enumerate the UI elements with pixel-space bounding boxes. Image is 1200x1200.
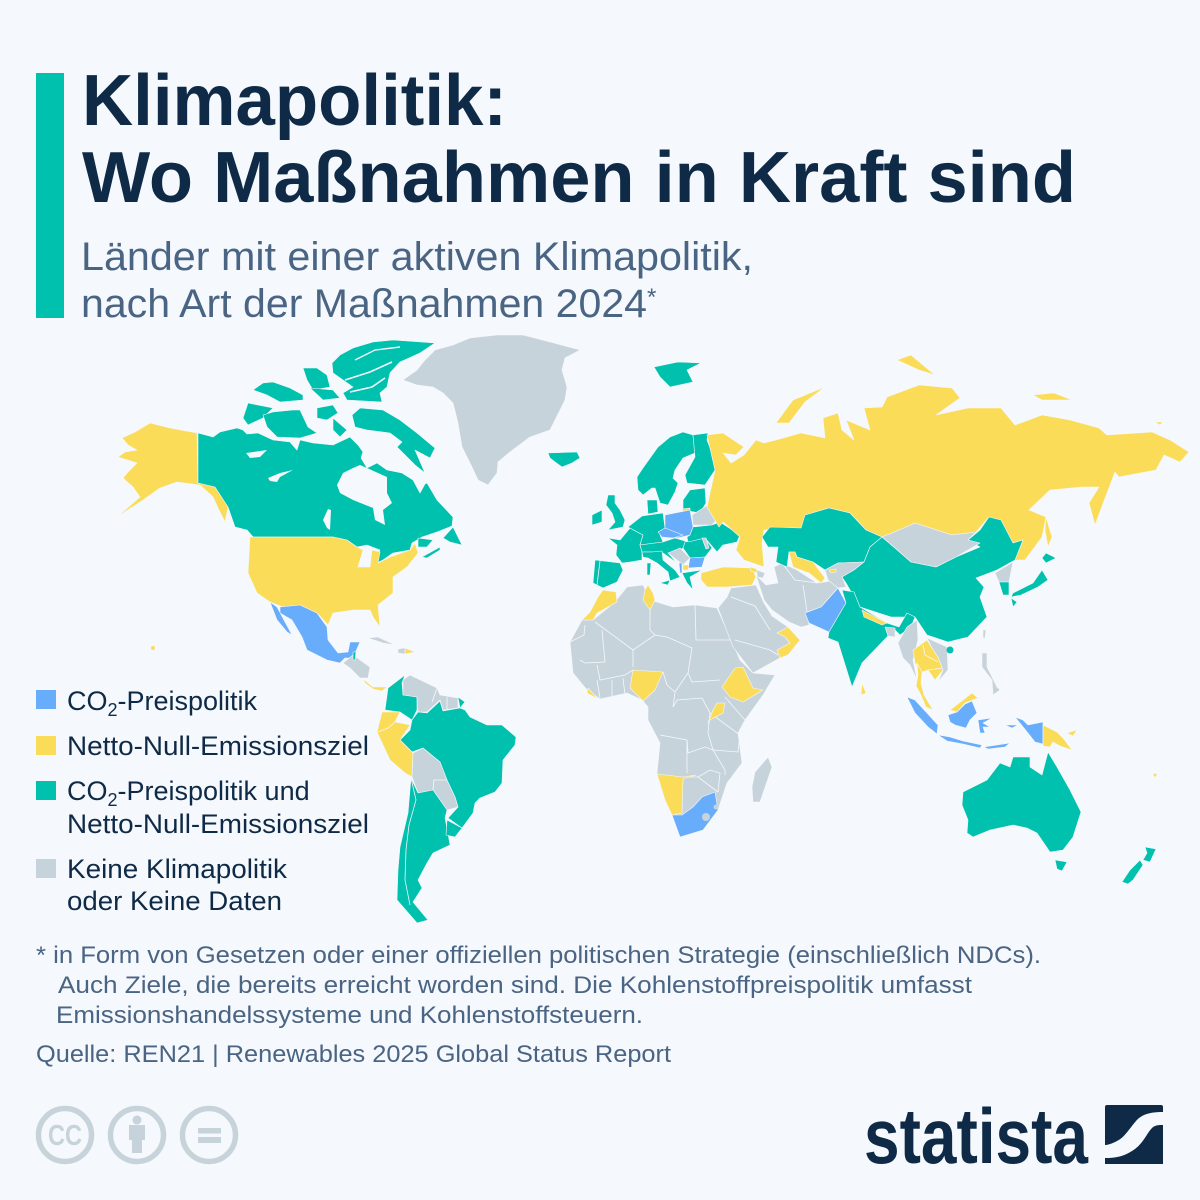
Canada <box>198 340 462 565</box>
legend item: none: Keine Klimapolitik <box>67 854 288 884</box>
subtitle: nach Art der Maßnahmen 2024 <box>81 282 647 326</box>
Hainan <box>946 646 954 654</box>
icon: statista mark <box>1105 1105 1163 1164</box>
legend item: net zero: Netto-Null-Emissionsziel <box>67 731 369 761</box>
Brazil <box>400 701 516 828</box>
Africa <box>570 585 775 837</box>
South America <box>377 675 516 923</box>
Germany and Benelux <box>628 513 665 545</box>
Russia <box>707 355 1189 567</box>
footnote: Emissionshandelssysteme und Kohlenstoffsteuern. <box>56 1002 643 1029</box>
Balkans <box>668 548 690 565</box>
Sri Lanka <box>861 683 866 695</box>
Belarus <box>692 505 718 525</box>
icon: creative commons: CC <box>48 1120 82 1152</box>
icon: attribution <box>110 1108 164 1162</box>
Tasmania <box>1055 860 1067 871</box>
Europe <box>592 362 740 590</box>
Iceland <box>548 452 580 467</box>
Moldova <box>702 538 709 549</box>
legend item: both: 2 <box>108 790 118 810</box>
Pakistan <box>805 588 846 632</box>
Thailand, Laos, Cambodia <box>913 640 943 680</box>
North America <box>117 335 580 691</box>
Australia <box>962 752 1081 852</box>
Romania <box>683 538 712 558</box>
legend <box>36 686 369 916</box>
subtitle: * <box>647 284 656 311</box>
Finland <box>685 433 715 485</box>
Malay peninsula <box>916 663 933 710</box>
legend item: both: CO <box>67 776 108 806</box>
Nigeria <box>630 670 663 701</box>
Papua New Guinea <box>1043 725 1072 750</box>
icon: creative commons <box>38 1108 92 1162</box>
Greenland <box>403 335 580 485</box>
statista logo: statista <box>864 1092 1088 1180</box>
Vietnam <box>927 638 948 682</box>
France <box>608 528 643 563</box>
legend item: both: -Preispolitik und <box>118 776 310 806</box>
Madagascar <box>752 757 772 802</box>
legend item: both <box>36 776 369 839</box>
Ethiopia <box>722 667 763 702</box>
world map <box>117 335 1189 923</box>
Venezuela, Guyana, Suriname <box>403 675 458 712</box>
footnote: * in Form von Gesetzen oder einer offiziellen politischen Strategie (einschließlich NDCs). <box>36 942 1041 969</box>
Kyrgyzstan and Tajikistan <box>825 562 864 588</box>
Arabia and Levant <box>718 585 800 673</box>
United Kingdom <box>606 495 625 530</box>
Uganda <box>708 703 725 723</box>
subtitle <box>81 235 753 326</box>
Taiwan <box>983 630 986 638</box>
Uruguay <box>446 820 462 837</box>
Spain and Portugal <box>593 560 623 588</box>
Asia <box>701 355 1189 749</box>
Morocco <box>582 590 617 620</box>
Italy <box>642 551 680 581</box>
Iran, Afghanistan, Turkmenistan <box>756 563 846 627</box>
China <box>842 517 1023 642</box>
Chile and Argentina <box>397 778 450 923</box>
Turkey <box>701 567 756 587</box>
French Guiana <box>458 697 465 708</box>
Japan <box>1011 553 1056 607</box>
legend item: CO2 pricing <box>36 686 258 720</box>
Indonesia <box>907 697 1043 749</box>
legend item: none: oder Keine Daten <box>67 886 282 916</box>
title: Wo Maßnahmen in Kraft sind <box>82 138 1076 218</box>
Mongolia <box>882 523 980 567</box>
Oman and UAE <box>777 627 800 658</box>
Korea <box>995 562 1013 582</box>
accent bar <box>36 73 64 318</box>
USA <box>248 537 418 627</box>
Oceania <box>962 725 1156 884</box>
legend item: CO2 pricing: -Preispolitik <box>118 686 258 716</box>
title: Klimapolitik: <box>82 61 507 141</box>
legend item: CO2 pricing: CO <box>67 686 108 716</box>
Ecuador and Peru <box>377 712 413 777</box>
Poland <box>665 510 693 538</box>
Namibia <box>657 774 696 815</box>
Central Europe <box>640 538 688 563</box>
footnote: Auch Ziele, die bereits erreicht worden sind. Die Kohlenstoffpreispolitik umfasst <box>58 972 972 999</box>
Kazakhstan <box>762 508 882 570</box>
Central America and Caribbean <box>343 637 415 691</box>
Ukraine <box>687 522 740 552</box>
Malaysian Borneo <box>950 693 978 712</box>
Czechia <box>658 528 683 538</box>
Bangladesh <box>885 627 895 637</box>
Ireland <box>592 510 602 525</box>
South Africa <box>672 792 718 837</box>
Norway and Sweden <box>637 432 695 505</box>
legend item: CO2 pricing: 2 <box>108 700 118 720</box>
Nepal <box>862 610 887 625</box>
legend item: both: Netto-Null-Emissionsziel <box>67 809 369 839</box>
Colombia <box>385 675 417 720</box>
Svalbard <box>654 362 701 387</box>
Mexico <box>270 602 360 663</box>
footnote <box>36 942 1041 1029</box>
Tunisia <box>643 585 655 610</box>
Bolivia and Paraguay <box>412 748 458 810</box>
Hawaii <box>151 646 155 650</box>
Baltics <box>683 488 706 513</box>
Myanmar <box>898 620 918 680</box>
Uzbekistan <box>789 552 825 583</box>
Alaska <box>117 423 228 522</box>
icon: no derivatives <box>182 1108 236 1162</box>
legend item: none <box>36 854 288 916</box>
Philippines <box>982 653 1000 695</box>
Fiji <box>1154 774 1156 776</box>
title <box>82 61 1076 218</box>
Liberia <box>587 688 598 699</box>
source: Quelle: REN21 | Renewables 2025 Global Status Report <box>36 1041 671 1068</box>
India <box>828 590 915 687</box>
Lesotho <box>702 813 710 821</box>
Denmark <box>647 500 658 514</box>
New Zealand <box>1122 847 1156 884</box>
subtitle: Länder mit einer aktiven Klimapolitik, <box>81 235 753 279</box>
